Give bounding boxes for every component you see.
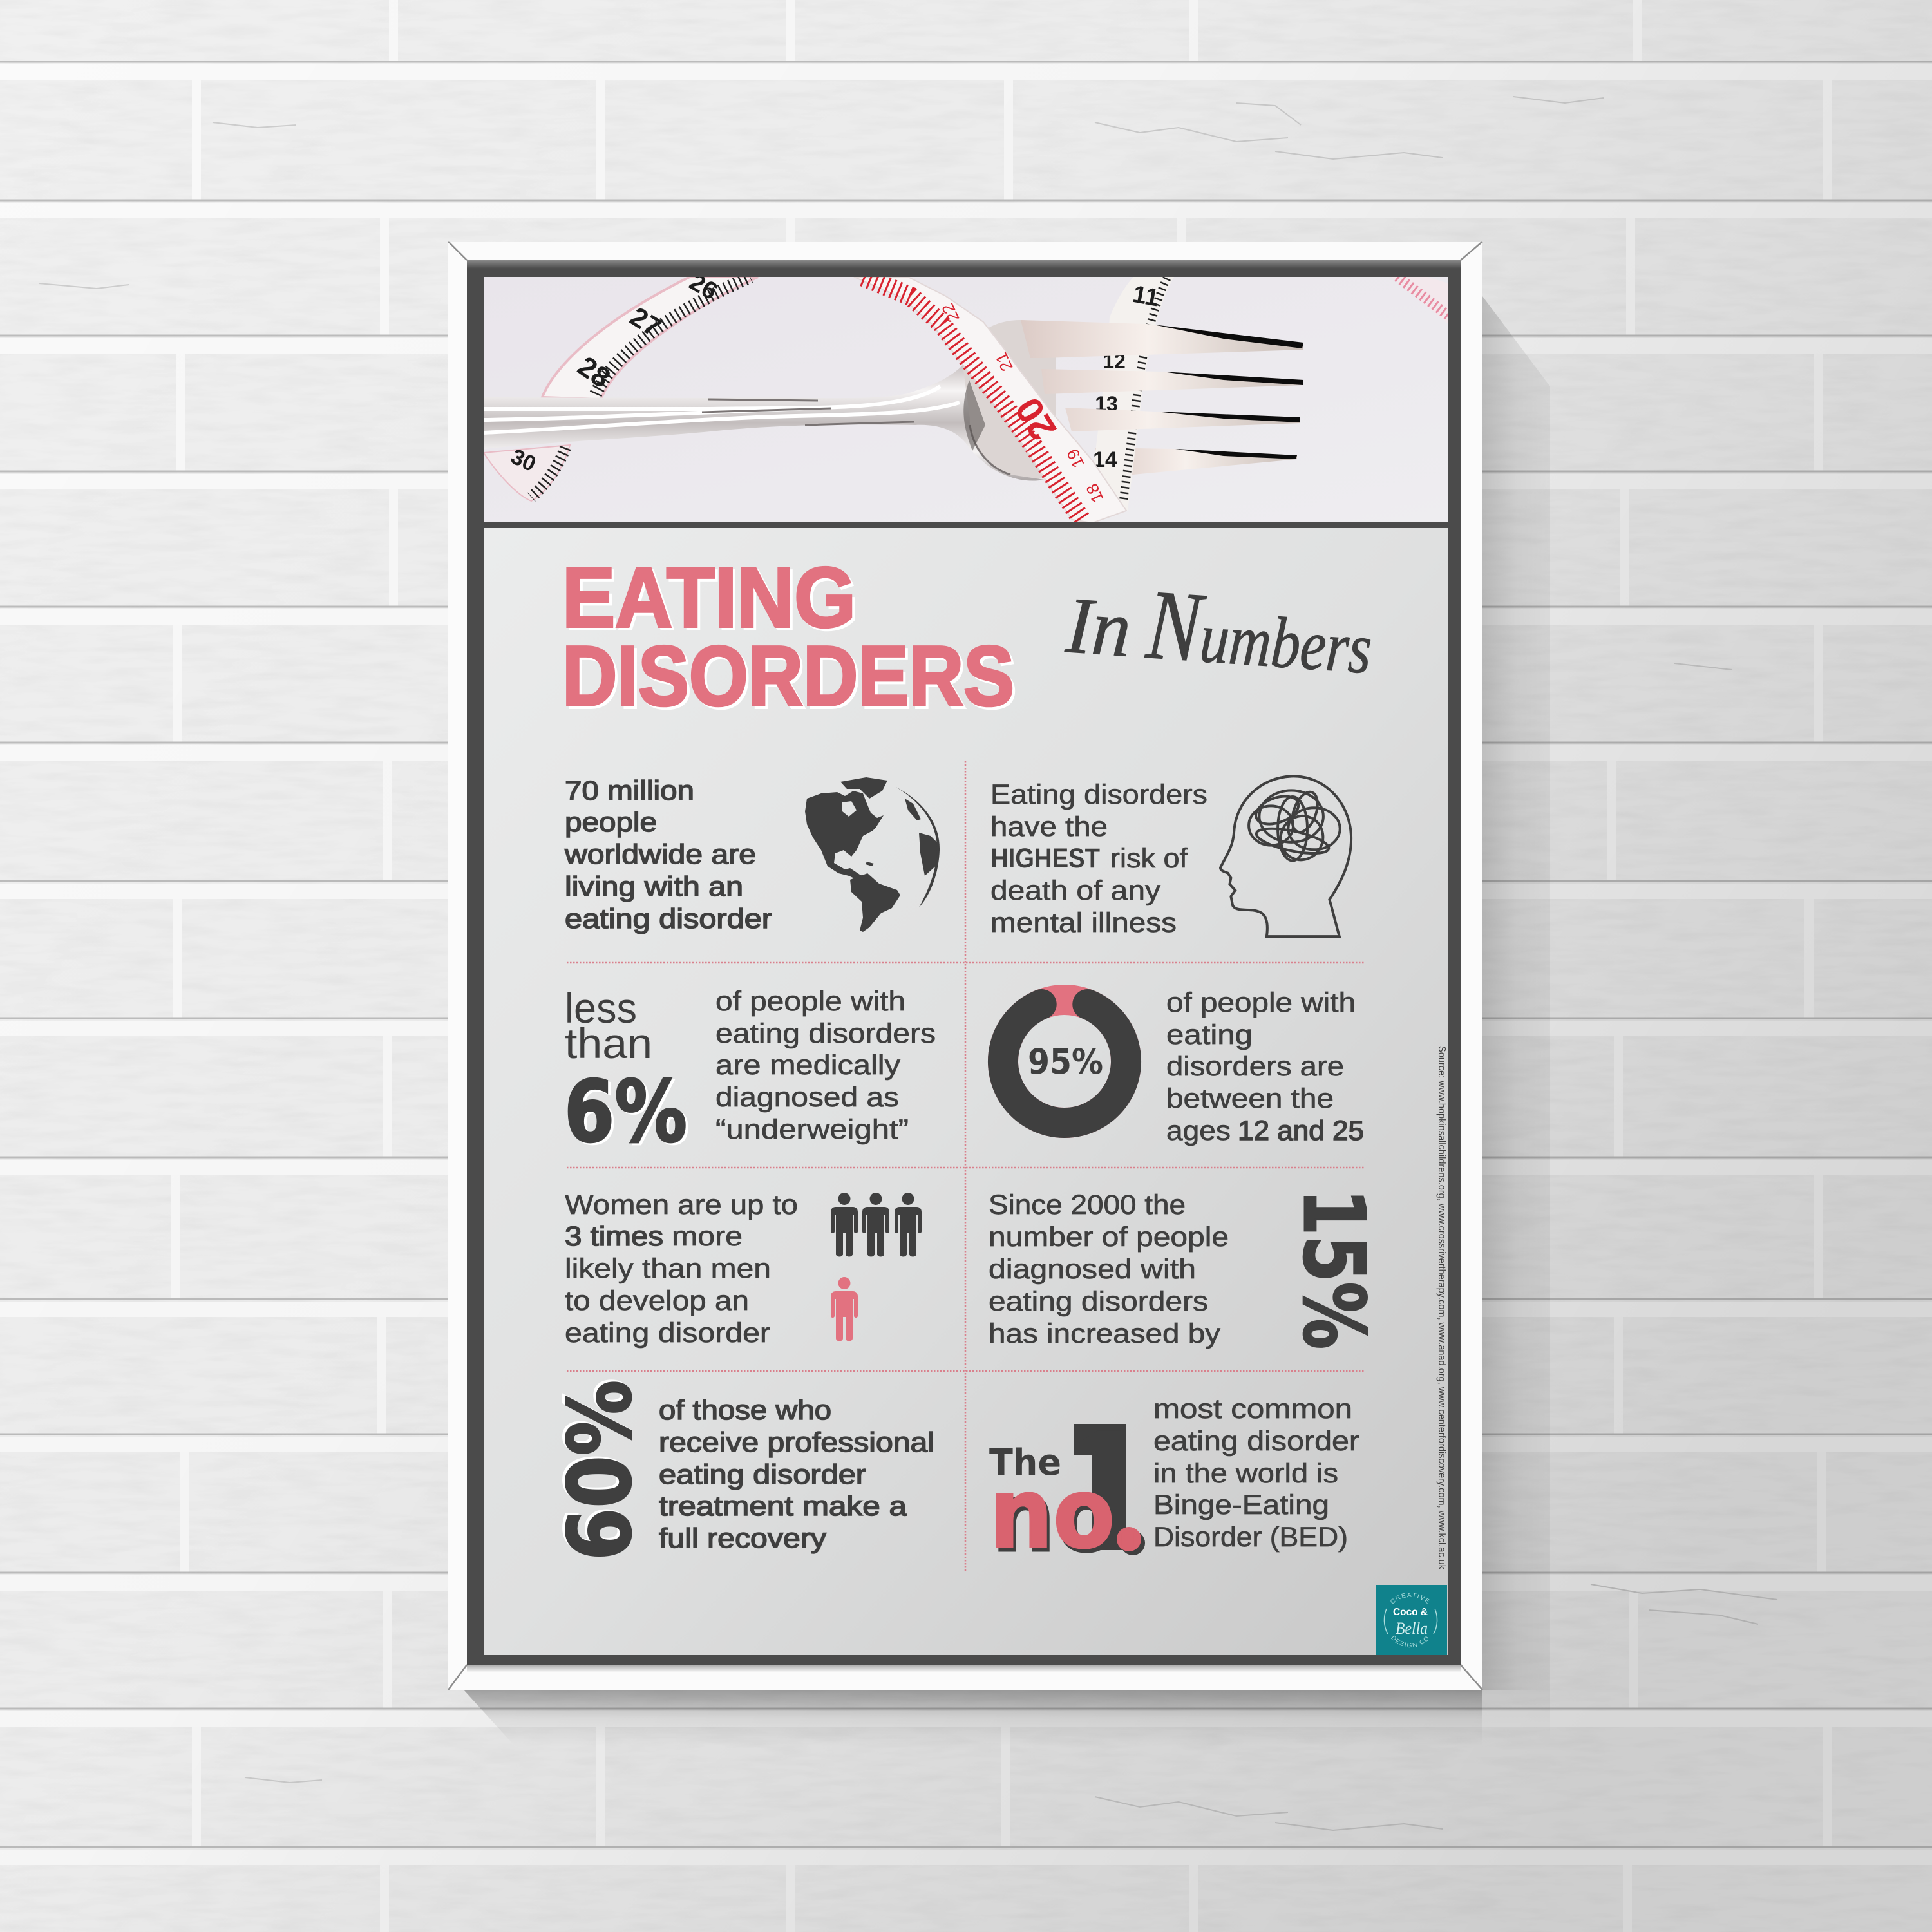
panel: highest risk: death of any — [990, 875, 1161, 906]
red-numbered tape over fork: 21 — [991, 349, 1017, 374]
back tape behind tines — [1092, 277, 1174, 511]
panel: less than 6%: eating disorders — [715, 1018, 936, 1049]
panel: 70 million: 70 million — [565, 775, 694, 806]
panel: ages 12 and 25: eating — [1166, 1019, 1253, 1050]
source line: Source: www.hopkinsallchildrens.org, www.crossrivertherapy.com, www.anad.org, www.centerfordiscovery.com, www.kcl.ac.uk — [1436, 1046, 1447, 1570]
logo: Coco and Bella: CREATIVE — [1390, 1593, 1430, 1604]
panel: women 3 times: eating disorder — [565, 1318, 770, 1349]
The no.1 graphic: 1 — [1056, 1394, 1153, 1587]
red-numbered tape over fork: 18 — [1082, 480, 1108, 506]
panel: full recovery: of those who — [659, 1395, 831, 1426]
fork head and tines — [963, 320, 1303, 479]
black-numbered tape arch: 26 — [685, 269, 722, 305]
panel: full recovery: eating disorder — [659, 1459, 866, 1490]
rotated stat: 60%: 60% — [550, 1380, 650, 1560]
panel: ages 12 and 25: 12 and 25 — [1238, 1115, 1364, 1146]
The no.1 graphic: The — [989, 1442, 1061, 1484]
panel: full recovery — [659, 1395, 934, 1554]
icon: head with tangled brain — [1220, 776, 1351, 936]
panel: ages 12 and 25: ages — [1166, 1115, 1231, 1146]
title: EATING DISORDERS — [562, 550, 1014, 723]
panel: ages 12 and 25: between the — [1166, 1083, 1334, 1114]
panel: less than 6%: “underweight” — [715, 1114, 909, 1145]
panel: since 2000: diagnosed with — [989, 1254, 1196, 1285]
back tape behind tines: 13 — [1095, 392, 1118, 415]
photo: fork and measuring tape — [484, 269, 1448, 523]
panel: binge-eating: Disorder (BED) — [1153, 1522, 1348, 1553]
The no.1 graphic — [989, 1424, 1145, 1555]
panel: women 3 times: 3 times — [565, 1221, 663, 1252]
panel: since 2000: number of people — [989, 1222, 1229, 1253]
panel: highest risk — [990, 779, 1208, 938]
fork handle — [484, 365, 1045, 481]
panel: less than 6%: of people with — [715, 986, 905, 1017]
poster paper — [484, 528, 1448, 1655]
red-numbered tape over fork: 22 — [938, 300, 963, 325]
divider under photo — [484, 522, 1448, 528]
panel: 70 million: people — [565, 807, 657, 838]
title: EATING DISORDERS: DISORDERS — [562, 629, 1014, 723]
frame cast shadow on wall — [464, 296, 1550, 1747]
rotated stat: 15%: 15% — [1285, 1189, 1383, 1349]
panel: binge-eating: Binge-Eating — [1153, 1490, 1329, 1520]
panel: women 3 times: more — [672, 1221, 743, 1252]
panel: ages 12 and 25: disorders are — [1166, 1051, 1344, 1082]
back tape behind tines: 14 — [1093, 448, 1117, 472]
The no.1 graphic: no — [989, 1458, 1115, 1570]
logo: Coco and Bella: Coco & — [1393, 1607, 1428, 1618]
The no.1 graphic: . — [1116, 1470, 1139, 1564]
panel: 70 million: eating disorder — [565, 904, 772, 934]
logo: Coco and Bella: DESIGN CO — [1391, 1635, 1428, 1647]
panel: less than 6% — [564, 984, 936, 1162]
panel: binge-eating: in the world is — [1153, 1458, 1338, 1489]
panel: full recovery: treatment make a — [659, 1491, 907, 1522]
donut chart: 95% — [1003, 999, 1126, 1123]
panel: since 2000: eating disorders — [989, 1286, 1208, 1317]
icon: globe — [805, 777, 940, 932]
fourth tine — [1095, 448, 1297, 475]
icon: one man — [831, 1277, 858, 1341]
panel: women 3 times — [565, 1189, 798, 1349]
black-numbered tape arch: 27 — [625, 301, 667, 343]
black-numbered tape arch: 30 — [507, 444, 540, 477]
panel: less than 6%: than — [565, 1019, 652, 1067]
panel: women 3 times: Women are up to — [565, 1189, 798, 1220]
top-right tape corner — [1391, 277, 1448, 324]
panel: binge-eating — [1153, 1394, 1359, 1553]
back tape behind tines: 11 — [1131, 281, 1161, 312]
panel: ages 12 and 25 — [1166, 987, 1364, 1146]
title: EATING DISORDERS: EATING — [562, 550, 856, 645]
panel: ages 12 and 25: of people with — [1166, 987, 1356, 1018]
panel: highest risk: mental illness — [990, 907, 1177, 938]
panel: 70 million: living with an — [565, 871, 743, 902]
panel: binge-eating: most common — [1153, 1394, 1352, 1425]
subtitle: In Numbers: Numbers — [1142, 569, 1376, 695]
logo: Coco and Bella — [1376, 1585, 1447, 1655]
donut chart: 95%: 95% — [1028, 1041, 1103, 1082]
panel: less than 6%: less — [565, 984, 637, 1032]
subtitle: In Numbers: In — [1063, 581, 1134, 674]
black-numbered tape arch — [484, 269, 758, 501]
red-numbered tape over fork: 20 — [1007, 390, 1065, 448]
logo: Coco and Bella: Bella — [1396, 1619, 1428, 1638]
panel: 70 million: worldwide are — [564, 839, 756, 870]
panel: highest risk: Eating disorders — [990, 779, 1208, 810]
red-numbered tape over fork — [854, 277, 1126, 523]
panel: less than 6%: are medically — [715, 1050, 901, 1081]
grid dividers — [567, 761, 1365, 1573]
panel: less than 6%: 6% — [564, 1063, 687, 1162]
panel: since 2000 — [989, 1189, 1229, 1349]
back tape behind tines: 12 — [1103, 350, 1126, 373]
panel: since 2000: has increased by — [989, 1318, 1221, 1349]
panel: women 3 times: to develop an — [565, 1285, 749, 1316]
icon: three women — [831, 1193, 922, 1257]
panel: since 2000: Since 2000 the — [989, 1189, 1186, 1220]
panel: highest risk: HIGHEST — [990, 843, 1100, 874]
red-numbered tape over fork: 19 — [1063, 446, 1088, 471]
panel: highest risk: have the — [990, 811, 1108, 842]
panel: 70 million — [564, 775, 772, 934]
black-numbered tape arch: 28 — [572, 350, 616, 394]
panel: binge-eating: eating disorder — [1153, 1426, 1359, 1457]
panel: full recovery: receive professional — [659, 1427, 934, 1458]
panel: full recovery: full recovery — [659, 1523, 827, 1554]
subtitle: In Numbers — [1063, 563, 1376, 695]
white picture frame — [448, 242, 1482, 1690]
panel: women 3 times: likely than men — [565, 1253, 771, 1284]
panel: highest risk: risk of — [1110, 843, 1188, 874]
panel: less than 6%: diagnosed as — [715, 1082, 899, 1113]
